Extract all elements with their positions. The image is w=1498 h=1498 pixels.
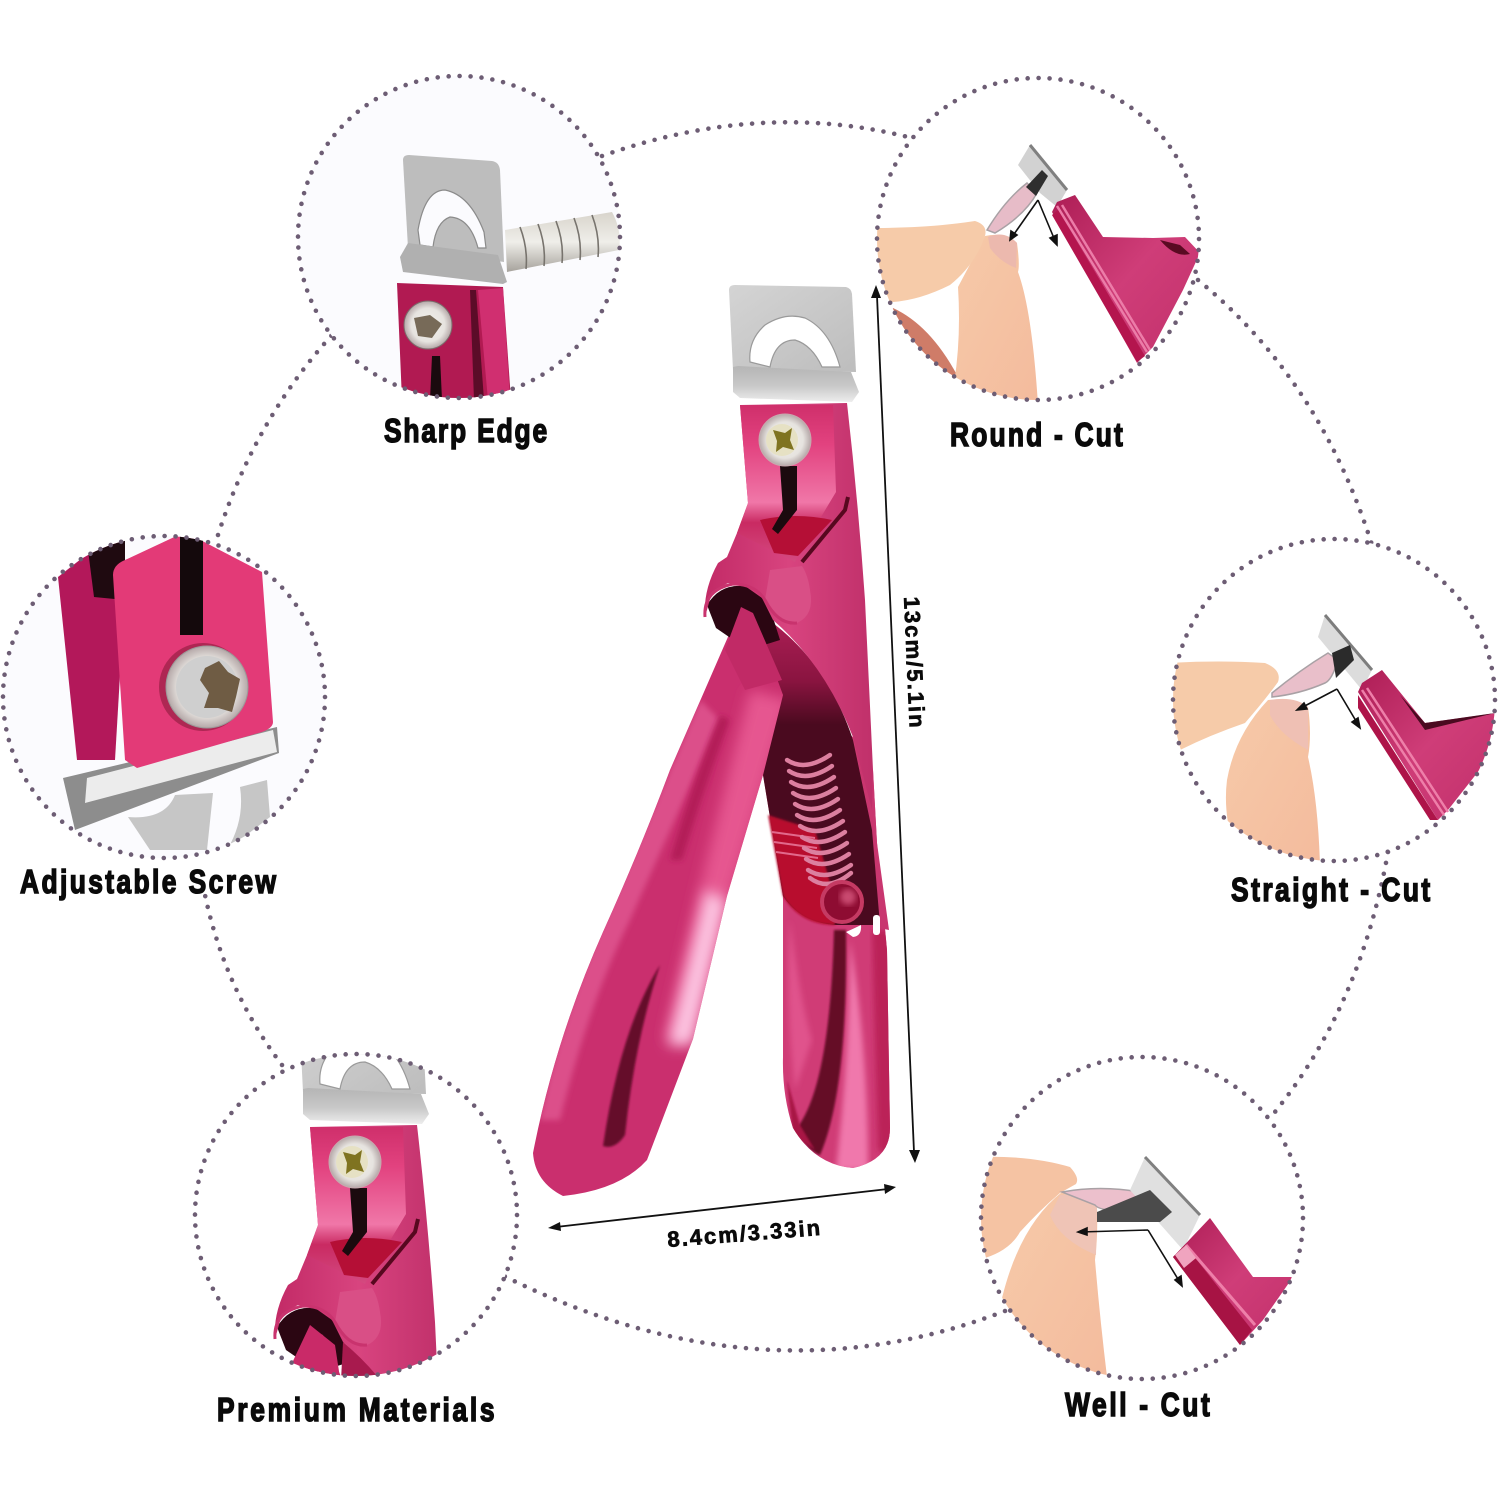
spring hook ring: [822, 882, 862, 922]
icon: blade: [1318, 615, 1372, 690]
panel: round cut detail: [872, 78, 1200, 405]
bright right band: [665, 690, 790, 1040]
panel: adjustable screw detail: [3, 530, 325, 858]
spring coils: [787, 755, 851, 884]
holes: [846, 915, 880, 937]
icon: thumb: [1226, 700, 1320, 865]
icon: filler under fold: [341, 1342, 376, 1376]
icon: thumbnail: [1270, 699, 1308, 750]
right outer strip: [853, 737, 889, 930]
icon: blade: [1018, 145, 1067, 207]
panel: premium materials detail: [192, 1052, 520, 1378]
icon: screw: [159, 643, 248, 731]
icon: thumb: [1002, 1192, 1108, 1385]
icon: acrylic nail tip: [1272, 653, 1338, 697]
icon: front panel: [113, 532, 273, 768]
panel: well cut detail: [975, 1057, 1303, 1385]
slit: [180, 535, 203, 635]
icon: thumbnail: [988, 235, 1017, 268]
label: adjustable screw: Adjustable Screw: [20, 864, 277, 901]
icon: pink head with screw: [397, 283, 511, 400]
label: well cut: Well - Cut: [1065, 1387, 1210, 1424]
icon: side panel: [58, 542, 120, 760]
width dimension arrow: [548, 1184, 896, 1231]
icon: nail tip: [1062, 1188, 1140, 1210]
highlight: [668, 890, 726, 1045]
icon: blade: [1097, 1157, 1200, 1250]
label: straight cut: Straight - Cut: [1231, 872, 1430, 909]
left handle: [533, 636, 783, 1196]
panel: sharp edge detail: [298, 76, 620, 400]
icon: handle: [1173, 1218, 1293, 1345]
cutter head and blade: [705, 285, 873, 810]
icon: index finger: [975, 1157, 1077, 1258]
icon: handle: [1358, 670, 1497, 820]
icon: lower blade: [63, 727, 279, 850]
icon: threaded screw: [505, 212, 620, 272]
icon: acrylic nail tip: [987, 183, 1037, 233]
panel: straight cut detail: [1168, 539, 1497, 865]
height label: 13cm/5.1in: [899, 596, 930, 728]
icon: closeup of cutter head: [273, 1054, 436, 1376]
dark sweep: [603, 965, 660, 1147]
icon: second fingertip: [892, 308, 956, 376]
dotted connector ring: [205, 122, 1388, 1350]
label: premium materials: Premium Materials: [217, 1392, 495, 1429]
arrows: round cut: [1010, 200, 1057, 245]
width label: 8.4cm/3.33in: [666, 1215, 821, 1252]
icon: thumbnail: [1050, 1194, 1097, 1255]
label: sharp edge: Sharp Edge: [384, 413, 547, 450]
icon: blade plate: [400, 155, 507, 284]
label: round cut: Round - Cut: [950, 417, 1123, 454]
arrows: straight cut: [1297, 689, 1360, 728]
spring channel: [757, 612, 880, 925]
icon: index finger: [872, 221, 986, 302]
icon: handle: [1052, 195, 1200, 363]
icon: handle tip: [293, 1325, 340, 1376]
main product: nail tip cutter: [525, 285, 895, 1200]
icon: index finger: [1168, 662, 1279, 750]
dark ridge: [670, 715, 730, 860]
right handle: [763, 736, 890, 1168]
height dimension arrow: [871, 285, 920, 1163]
light band on left edge: [540, 700, 720, 1120]
arrows: well cut: [1078, 1228, 1182, 1286]
icon: thumb: [950, 235, 1038, 405]
